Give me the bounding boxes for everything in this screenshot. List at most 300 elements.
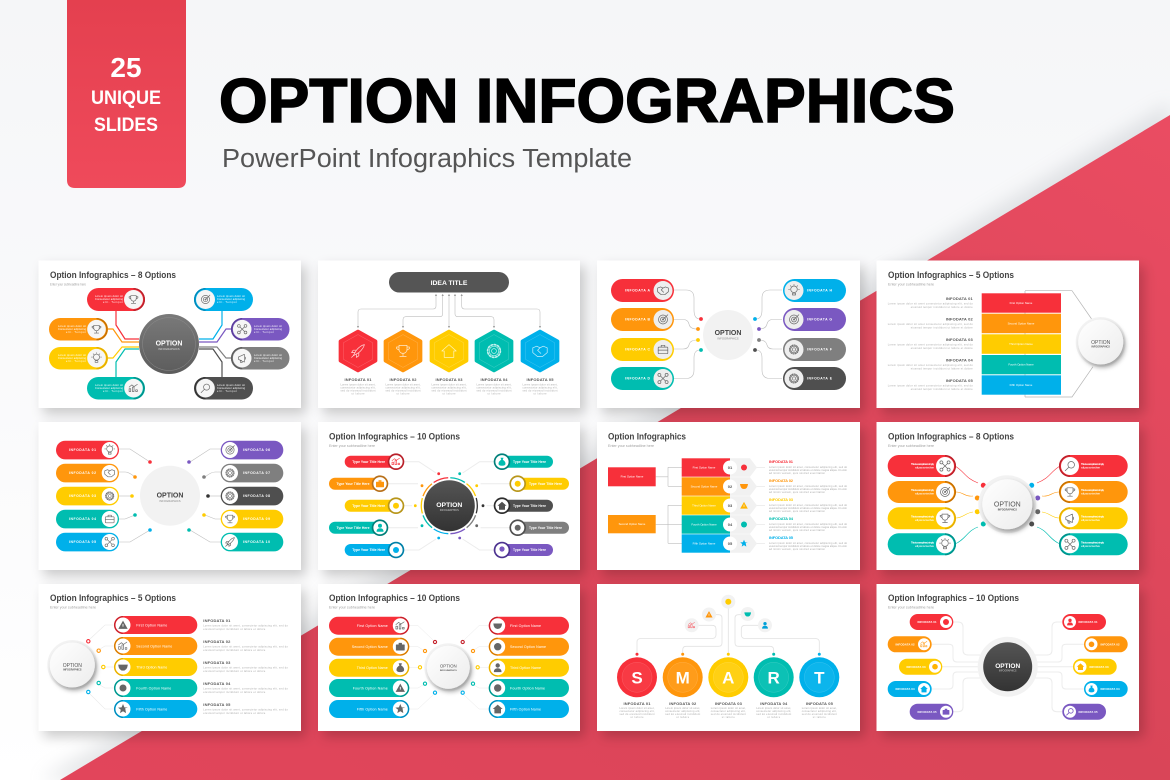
slide 12 heading: Enter your subheadline here	[888, 606, 934, 610]
slide 1 pills: elit. Tempor	[254, 360, 274, 363]
slide 7 rows	[682, 458, 757, 553]
slide 7 text column: eiusmod tempor incididunt ut labore et dolore magna aliqua. Ut enim	[769, 526, 847, 529]
letter T: Lorem ipsum dolor sit amet,	[802, 707, 837, 710]
slide 5 right pills: INFODATA 07	[243, 471, 270, 475]
slide 7 text column: INFODATA 02	[769, 478, 794, 483]
slide 1 pills: Consectetur adipiscing	[58, 328, 87, 331]
hexagon 04: consectetur adipiscing elit,	[476, 386, 512, 390]
slide 8 right pills: This is a sample text. simply	[1081, 515, 1105, 518]
slide 7 text column: ad minim veniam, quis nostrud exercitation	[769, 529, 826, 532]
slide 4 text column: Lorem ipsum dolor sit amet consectetur adipiscing elit, sed do	[888, 344, 973, 346]
slide 7 text column: Lorem ipsum dolor sit amet, consectetur adipiscing elit, sed do	[769, 485, 848, 488]
slide 12 left pills	[888, 614, 953, 720]
slide 8 left pills: This is a sample text. simply	[911, 489, 935, 492]
slide 4 text column: Lorem ipsum dolor sit amet consectetur adipiscing elit, sed do	[888, 384, 973, 388]
slide 1 pills: Consectetur adipiscing	[254, 357, 283, 360]
slide 10 left pills: Fifth Option Name	[357, 707, 388, 711]
slide 4 bracket lines	[1025, 291, 1093, 397]
slide 1 pills	[49, 288, 290, 400]
letter T: consectetur adipiscing elit,	[802, 710, 837, 713]
slide 7 tree lines	[656, 467, 765, 544]
slide 4 stacked bars: Second Option Name	[1008, 322, 1035, 326]
letter R	[754, 653, 794, 719]
slide 7 text column: eiusmod tempor incididunt ut labore et dolore magna aliqua. Ut enim	[769, 488, 847, 491]
slide 8 left pills: edit your own text here	[915, 466, 935, 470]
main title: OPTION INFOGRAPHICS	[219, 67, 955, 136]
hexagon 01: Lorem ipsum dolor sit amet,	[340, 384, 376, 386]
slide 4 stacked bars: First Option Name	[1010, 301, 1033, 305]
slide 4 text column: eiusmod tempor incididunt ut labore et dolore	[911, 326, 973, 330]
slide 8 right pills: This is a sample text. simply	[1081, 489, 1105, 492]
slide 7 rows: Third Option Name	[692, 504, 716, 508]
slide 3 right pills: INFODATA F	[807, 348, 832, 352]
slide 8 heading: Option Infographics – 8 Options	[888, 432, 1014, 442]
slide 12 left pills: INFODATA 03	[906, 665, 926, 669]
slide 10 option circle: INFOGRAPHICS	[440, 669, 457, 672]
slide 8 right pills: This is a sample text. simply	[1081, 463, 1105, 466]
slide 12 right pills: INFODATA 02	[1100, 642, 1120, 646]
slide 9 text column: Lorem ipsum dolor sit amet, consectetur adipiscing elit, sed do	[203, 624, 288, 628]
slide 12: 10 options dark hub	[876, 584, 1139, 731]
slide 8 left pills: edit your own text here	[915, 492, 935, 496]
hexagon 01: INFODATA 01	[344, 377, 372, 382]
hexagon 05: Lorem ipsum dolor sit amet,	[522, 384, 558, 386]
slide 7 text column: INFODATA 05	[769, 535, 794, 540]
slide 1 pills: elit. Tempor	[217, 390, 237, 393]
slide 9 heading	[50, 593, 176, 610]
slide 7 text column: ad minim veniam, quis nostrud exercitation	[769, 548, 826, 551]
hexagon 02	[385, 331, 421, 396]
letter S: sed do eiusmod incididunt	[620, 713, 655, 716]
slide 9 text column: eiusmod tempor incididunt ut labore et dolore	[203, 649, 266, 652]
slide 12 centre circle	[978, 637, 1038, 697]
slide 9 text column: INFODATA 01	[203, 618, 231, 623]
slide 7 text column: eiusmod tempor incididunt ut labore et dolore magna aliqua. Ut enim	[769, 469, 847, 472]
slide 12 connectors	[932, 622, 1084, 712]
letter M: Lorem ipsum dolor sit amet,	[665, 707, 700, 710]
slide 1: 8 options hub	[38, 260, 301, 408]
hexagon 05: consectetur adipiscing elit,	[522, 386, 558, 390]
slide 8 right pills	[1059, 455, 1128, 555]
slide 1 pills: Lorem ipsum dolor sit	[95, 384, 123, 387]
slide 11 top icons	[685, 595, 772, 632]
slide 3 centre circle	[703, 310, 753, 360]
slide 10 left pills: Fourth Option Name	[353, 686, 388, 690]
slide 8 connectors	[955, 466, 1060, 544]
badge: 25 unique slides: 25	[110, 52, 142, 83]
slide 9 text column: eiusmod tempor incididunt ut labore et dolore	[203, 712, 266, 715]
letter T: ut labore	[813, 716, 826, 719]
slide 7 text column: eiusmod tempor incididunt ut labore et dolore magna aliqua. Ut enim	[769, 507, 847, 510]
slide 10 right pills	[489, 617, 569, 718]
slide 1 centre circle: INFOGRAPHICS	[158, 347, 180, 351]
slide 6 right pills: Type Your Title Here	[513, 460, 546, 464]
slide 7 text column: INFODATA 01	[769, 459, 794, 464]
slide 7 rows: 03	[728, 503, 733, 508]
slide 2: idea title hexagons	[318, 260, 580, 408]
slide 5 left pills: INFODATA 04	[69, 517, 96, 521]
slide 9 pills: Second Option Name	[136, 644, 172, 648]
badge: 25 unique slides: SLIDES	[94, 115, 158, 136]
letter M: sed do eiusmod incididunt	[665, 713, 700, 716]
slide 12 heading	[888, 593, 1019, 610]
slide 4 stacked bars: Fifth Option Name	[1010, 383, 1033, 387]
slide 10 right pills: Third Option Name	[510, 666, 541, 670]
hexagon 02: consectetur adipiscing elit,	[386, 386, 421, 390]
slide 8 centre circle: OPTION	[994, 502, 1021, 508]
slide 4 text column: eiusmod tempor incididunt ut labore et dolore	[911, 368, 973, 370]
hexagon 03: ut labore	[442, 392, 456, 396]
hexagon 04: Lorem ipsum dolor sit amet,	[476, 384, 512, 386]
letter A: ut labore	[722, 716, 735, 719]
slide 9 pills: Fifth Option Name	[136, 707, 167, 711]
slide 6 centre circle: INFOGRAPHICS	[440, 509, 459, 512]
slide 12 right pills: INFODATA 05	[1078, 710, 1098, 714]
hexagon 03: Lorem ipsum dolor sit amet,	[432, 384, 467, 386]
slide 5 right pills: INFODATA 06	[243, 448, 270, 452]
slide 4 text column: INFODATA 04	[946, 358, 973, 362]
letter S: INFODATA 01	[624, 701, 651, 706]
slide 9 pills: Third Option Name	[136, 665, 167, 669]
badge: 25 unique slides	[67, 0, 186, 188]
slide 9 pills	[114, 616, 197, 718]
slide 4 stacked bars: Third Option Name	[1009, 342, 1033, 346]
letter A	[708, 653, 748, 719]
slide 8 right pills: edit your own text here	[1081, 492, 1101, 496]
second option box	[608, 515, 656, 533]
slide 6 heading	[329, 432, 460, 448]
slide 10: 10 options list	[318, 584, 580, 731]
slide 12 right pills: INFODATA 04	[1100, 687, 1120, 691]
slide 10 left pills: Second Option Name	[352, 645, 388, 649]
slide 5 left pills	[56, 441, 119, 551]
letter R: Lorem ipsum dolor sit amet,	[756, 707, 791, 710]
slide 10 right pills: Fourth Option Name	[510, 686, 545, 690]
letter T: T	[814, 668, 825, 688]
slide 4 text column	[888, 296, 973, 391]
slide 9 text column: INFODATA 05	[203, 702, 231, 707]
slide 9 option circle	[47, 640, 97, 690]
slide 4 text column: INFODATA 03	[946, 337, 973, 342]
slide 7 rows: First Option Name	[693, 466, 716, 470]
letter S: S	[631, 668, 643, 688]
slide 8 left pills: edit your own text here	[915, 519, 935, 522]
slide 1 heading: Enter your subheadline here	[50, 282, 86, 286]
slide 2 arrows	[357, 294, 541, 328]
hexagon 02: ut labore	[396, 392, 410, 396]
slide 12 left pills: INFODATA 02	[896, 642, 915, 646]
badge: 25 unique slides: UNIQUE	[91, 88, 161, 109]
slide 7 text column: ad minim veniam, quis nostrud exercitation	[769, 472, 826, 475]
hexagon 01: sed do eiusmod incididunt	[340, 390, 376, 392]
slide 3 right pills	[783, 279, 846, 390]
slide 9 text column: INFODATA 04	[203, 681, 231, 686]
slide 11 connectors	[637, 608, 819, 653]
slide 12 left pills: INFODATA 01	[918, 620, 937, 624]
slide 9 text column	[203, 618, 288, 715]
slide 8 left pills: This is a sample text. simply	[911, 463, 935, 466]
letter R: sed do eiusmod incididunt	[756, 713, 791, 716]
slide 9 option circle: INFOGRAPHICS	[63, 668, 82, 672]
slide 9 pills: First Option Name	[136, 623, 167, 627]
slide 3 connectors	[674, 290, 782, 378]
slide 4: 5 options stack	[876, 260, 1139, 408]
slide 7 text column: INFODATA 04	[769, 516, 794, 521]
slide 7 rows: 02	[728, 484, 733, 489]
slide 8 dots	[975, 483, 1040, 526]
letter A: INFODATA 03	[715, 701, 743, 706]
slide 3 left pills: INFODATA D	[625, 377, 651, 381]
letter M: INFODATA 02	[669, 701, 697, 706]
slide 9 text column: INFODATA 03	[203, 660, 231, 665]
slide 7 rows: 05	[728, 541, 733, 546]
slide 6 left pills: Type Your Title Here	[352, 460, 385, 464]
slide 8 right pills: This is a sample text. simply	[1081, 541, 1105, 544]
first option box: First Option Name	[621, 475, 644, 479]
slide 7 heading	[608, 432, 686, 448]
slide 1 pills: Consectetur adipiscing	[217, 298, 246, 301]
slide 7 text column: ad minim veniam, quis nostrud exercitation	[769, 510, 826, 513]
slide 11: SMART	[597, 584, 860, 731]
hexagon 03: INFODATA 03	[436, 377, 463, 382]
letter A: sed do eiusmod incididunt	[711, 713, 746, 716]
slide 1 pills: Consectetur adipiscing	[58, 357, 87, 360]
slide 8 centre circle: INFOGRAPHICS	[998, 508, 1017, 512]
slide 10 right pills: Second Option Name	[510, 645, 546, 649]
slide 3 dots	[696, 317, 761, 352]
slide 10 left pills: First Option Name	[357, 624, 388, 628]
slide 9 heading: Enter your subheadline here	[50, 606, 96, 610]
slide 8 left pills: This is a sample text. simply	[911, 541, 935, 544]
slide 1 pills: Lorem ipsum dolor sit	[217, 295, 245, 298]
hexagon 03: sed do eiusmod incididunt	[432, 390, 467, 392]
slide 6 segmented ring	[410, 466, 489, 545]
slide 9 text column: Lorem ipsum dolor sit amet, consectetur adipiscing elit, sed do	[203, 666, 288, 670]
slide 10 heading: Enter your subheadline here	[329, 606, 375, 610]
slide 4 stacked bars: Fourth Option Name	[1008, 362, 1034, 366]
letter M: consectetur adipiscing elit,	[665, 710, 700, 713]
slide 7 rows: Fourth Option Name	[691, 522, 717, 526]
slide 5 centre circle: OPTION	[157, 492, 183, 500]
slide 1 pills: elit. Tempor	[217, 301, 237, 304]
slide 6 left pills	[329, 453, 404, 558]
slide 9 ring dots	[87, 640, 105, 694]
hexagon 05: sed do eiusmod incididunt	[522, 390, 558, 392]
slide 9: 5 options list	[38, 584, 301, 731]
slide 3 left pills: INFODATA A	[625, 289, 651, 293]
hexagon 02: Lorem ipsum dolor sit amet,	[386, 384, 421, 386]
slide 9 text column: Lorem ipsum dolor sit amet, consectetur adipiscing elit, sed do	[203, 708, 288, 712]
slide 5 left pills: INFODATA 02	[69, 471, 96, 475]
slide 6 right pills	[494, 453, 569, 558]
letter T: INFODATA 05	[806, 701, 834, 706]
slide 6 left pills: Type Your Title Here	[336, 482, 370, 486]
slide 12 centre circle: OPTION	[995, 663, 1020, 670]
slide 3 centre circle: INFOGRAPHICS	[717, 336, 739, 340]
slide 4 text column: INFODATA 05	[946, 378, 973, 383]
letter S: ut labore	[630, 716, 644, 719]
hexagon 05	[522, 331, 558, 396]
slide 3 left pills: INFODATA C	[625, 348, 651, 352]
slide 3 right pills: INFODATA E	[807, 377, 833, 381]
letter A: consectetur adipiscing elit,	[711, 710, 746, 713]
slide 3 right pills: INFODATA G	[807, 318, 832, 322]
slide 4 heading	[888, 270, 1014, 286]
hexagon 02: sed do eiusmod incididunt	[386, 390, 421, 392]
letter S: consectetur adipiscing elit,	[620, 710, 655, 713]
slide 8 heading: Enter your subheadline here	[888, 444, 934, 448]
idea title pill	[389, 272, 509, 292]
slide 10 right pills: First Option Name	[510, 624, 541, 628]
slide 1 pills: elit. Tempor	[254, 331, 274, 334]
slide 4 text column: Lorem ipsum dolor sit amet consectetur adipiscing elit, sed do	[888, 364, 973, 367]
slide 7 rows: Fifth Option Name	[693, 542, 716, 546]
slide 8 left pills: edit your own text here	[915, 545, 935, 548]
slide 3: infodata A to H	[597, 260, 860, 408]
slide 1 pills: Lorem ipsum dolor sit	[95, 295, 123, 298]
slide 12 heading: Option Infographics – 10 Options	[888, 593, 1019, 603]
slide 4 text column: INFODATA 01	[946, 296, 973, 301]
slide 3 centre circle: OPTION	[715, 330, 741, 337]
slide 6: 10 options ring	[318, 422, 580, 570]
slide 4 text column: Lorem ipsum dolor sit amet consectetur adipiscing elit, sed do	[888, 323, 973, 326]
slide 1 connectors	[108, 311, 231, 377]
slide 8 right pills: edit your own text here	[1081, 545, 1101, 548]
slide 5 left pills: INFODATA 03	[69, 494, 96, 498]
slide 7 rows: 01	[728, 465, 733, 470]
first option box	[608, 467, 656, 486]
slide 12 left pills: INFODATA 05	[918, 710, 937, 714]
slide 1 centre circle	[139, 314, 199, 374]
slide 1 pills: Consectetur adipiscing	[95, 387, 124, 390]
slide 1 pills: elit. Tempor	[66, 331, 86, 334]
slide 8 right pills: edit your own text here	[1081, 466, 1101, 470]
hexagon 04: ut labore	[488, 392, 501, 396]
slide 6 centre circle: OPTION	[436, 502, 462, 509]
slide 7 text column: Lorem ipsum dolor sit amet, consectetur adipiscing elit, sed do	[769, 504, 848, 507]
slide 6 right pills: Type Your Title Here	[513, 548, 546, 552]
slide 6 left pills: Type Your Title Here	[352, 504, 385, 508]
slide 3 left pills	[611, 279, 674, 390]
slide 5: infodata 01 to 10	[38, 422, 301, 570]
hexagon 01: consectetur adipiscing elit,	[340, 386, 376, 390]
hexagon 05: INFODATA 05	[526, 377, 554, 382]
slide 7 text column: eiusmod tempor incididunt ut labore et dolore magna aliqua. Ut enim	[769, 545, 847, 548]
slide 6 right pills: Type Your Title Here	[529, 482, 562, 486]
slide 7 text column: Lorem ipsum dolor sit amet, consectetur adipiscing elit, sed do	[769, 466, 848, 469]
slide 1 pills: elit. Tempor	[66, 360, 86, 363]
slide 5 right pills: INFODATA 10	[243, 540, 270, 544]
hexagon 05: ut labore	[534, 392, 547, 396]
slide 1 pills: Lorem ipsum dolor sit	[254, 325, 282, 328]
slide 4 text column: eiusmod tempor incididunt ut labore et dolore	[911, 347, 973, 350]
slide 4 option circle	[1076, 317, 1126, 367]
slide 7 rows: Second Option Name	[691, 484, 718, 488]
idea title pill: IDEA TITLE	[431, 280, 468, 287]
hexagon 04: sed do eiusmod incididunt	[476, 390, 512, 392]
letter R: R	[768, 668, 780, 688]
slide 10 ring dots	[418, 640, 479, 694]
slide 10 option circle	[424, 643, 472, 691]
slide 6 dots	[414, 472, 484, 539]
letter T	[799, 653, 839, 719]
slide 7 text column: Lorem ipsum dolor sit amet, consectetur adipiscing elit, sed do	[769, 523, 848, 526]
slide 8 centre circle	[978, 475, 1036, 533]
slide 5 centre circle	[140, 466, 200, 526]
letter M	[663, 653, 703, 719]
slide 1 pills: Lorem ipsum dolor sit	[58, 354, 86, 357]
letter T: sed do eiusmod incididunt	[802, 713, 837, 716]
slide 9 text column: eiusmod tempor incididunt ut labore et dolore	[203, 670, 266, 673]
slide 7 text column	[769, 459, 848, 551]
letter A: Lorem ipsum dolor sit amet,	[711, 707, 746, 710]
slide 12 right pills	[1062, 614, 1128, 720]
hexagon 04: INFODATA 04	[480, 377, 508, 382]
slide 6 centre circle	[424, 480, 475, 531]
slide 9 text column: eiusmod tempor incididunt ut labore et dolore	[203, 628, 266, 631]
slide 4 text column: Lorem ipsum dolor sit amet consectetur adipiscing elit, sed do	[888, 302, 973, 306]
slide 4 option circle: INFOGRAPHICS	[1092, 346, 1110, 348]
slide 9 connectors	[90, 625, 114, 709]
slide 1 pills: elit. Tempor	[103, 301, 123, 304]
hexagon 01	[340, 331, 376, 396]
slide 9 text column: Lorem ipsum dolor sit amet, consectetur adipiscing elit, sed do	[203, 688, 288, 690]
slide 1 pills: elit. Tempor	[103, 390, 123, 393]
slide 4 stacked bars	[982, 293, 1061, 395]
letter R: consectetur adipiscing elit,	[756, 710, 791, 713]
hexagon 03	[431, 331, 467, 396]
slide 9 text column: eiusmod tempor incididunt ut labore et dolore	[203, 691, 266, 694]
letter R: ut labore	[767, 716, 781, 719]
second option box: Second Option Name	[619, 522, 646, 526]
slide 12 right pills: INFODATA 01	[1078, 620, 1098, 624]
slide 7 text column: Lorem ipsum dolor sit amet, consectetur adipiscing elit, sed do	[769, 542, 848, 545]
slide 9 pills: Fourth Option Name	[136, 686, 171, 690]
hexagon 04	[476, 331, 512, 396]
slide 8: 8 options wavy	[876, 422, 1139, 570]
slide 1 heading	[50, 270, 176, 286]
slide 4 text column: eiusmod tempor incididunt ut labore et dolore	[911, 306, 973, 309]
slide 5 right pills	[221, 441, 283, 551]
letter S	[617, 653, 657, 719]
slide 6 heading: Enter your subheadline here	[329, 444, 375, 448]
slide 10 heading	[329, 593, 460, 610]
letter R: INFODATA 04	[760, 701, 788, 706]
slide 9 text column: INFODATA 02	[203, 639, 231, 644]
slide 1 centre circle: OPTION	[156, 340, 182, 348]
slide 9 text column: Lorem ipsum dolor sit amet, consectetur adipiscing elit, sed do	[203, 646, 288, 648]
subtitle: PowerPoint Infographics Template	[222, 145, 632, 173]
slide 7 text column: INFODATA 03	[769, 497, 794, 502]
slide 7 heading: Option Infographics	[608, 432, 686, 442]
slide 12 centre circle: INFOGRAPHICS	[999, 670, 1017, 672]
slide 5 centre circle: INFOGRAPHICS	[159, 499, 181, 503]
letter M: M	[676, 668, 690, 688]
slide 7: option tree	[597, 422, 860, 570]
slide 7 rows: 04	[728, 522, 733, 527]
slide 8 left pills	[888, 455, 956, 555]
slide 10 left pills	[329, 617, 409, 718]
slide 9 option circle: OPTION	[63, 663, 82, 669]
slide 5 dots	[130, 460, 210, 532]
slide 5 left pills: INFODATA 01	[69, 448, 96, 452]
letter A: A	[722, 668, 734, 688]
letter S: Lorem ipsum dolor sit amet,	[620, 707, 655, 710]
slide 12 right pills: INFODATA 03	[1090, 665, 1109, 669]
slide 8 heading	[888, 432, 1014, 448]
slide 6 right pills: Type Your Title Here	[529, 526, 562, 530]
slide 7 text column: ad minim veniam, quis nostrud exercitation	[769, 491, 826, 494]
